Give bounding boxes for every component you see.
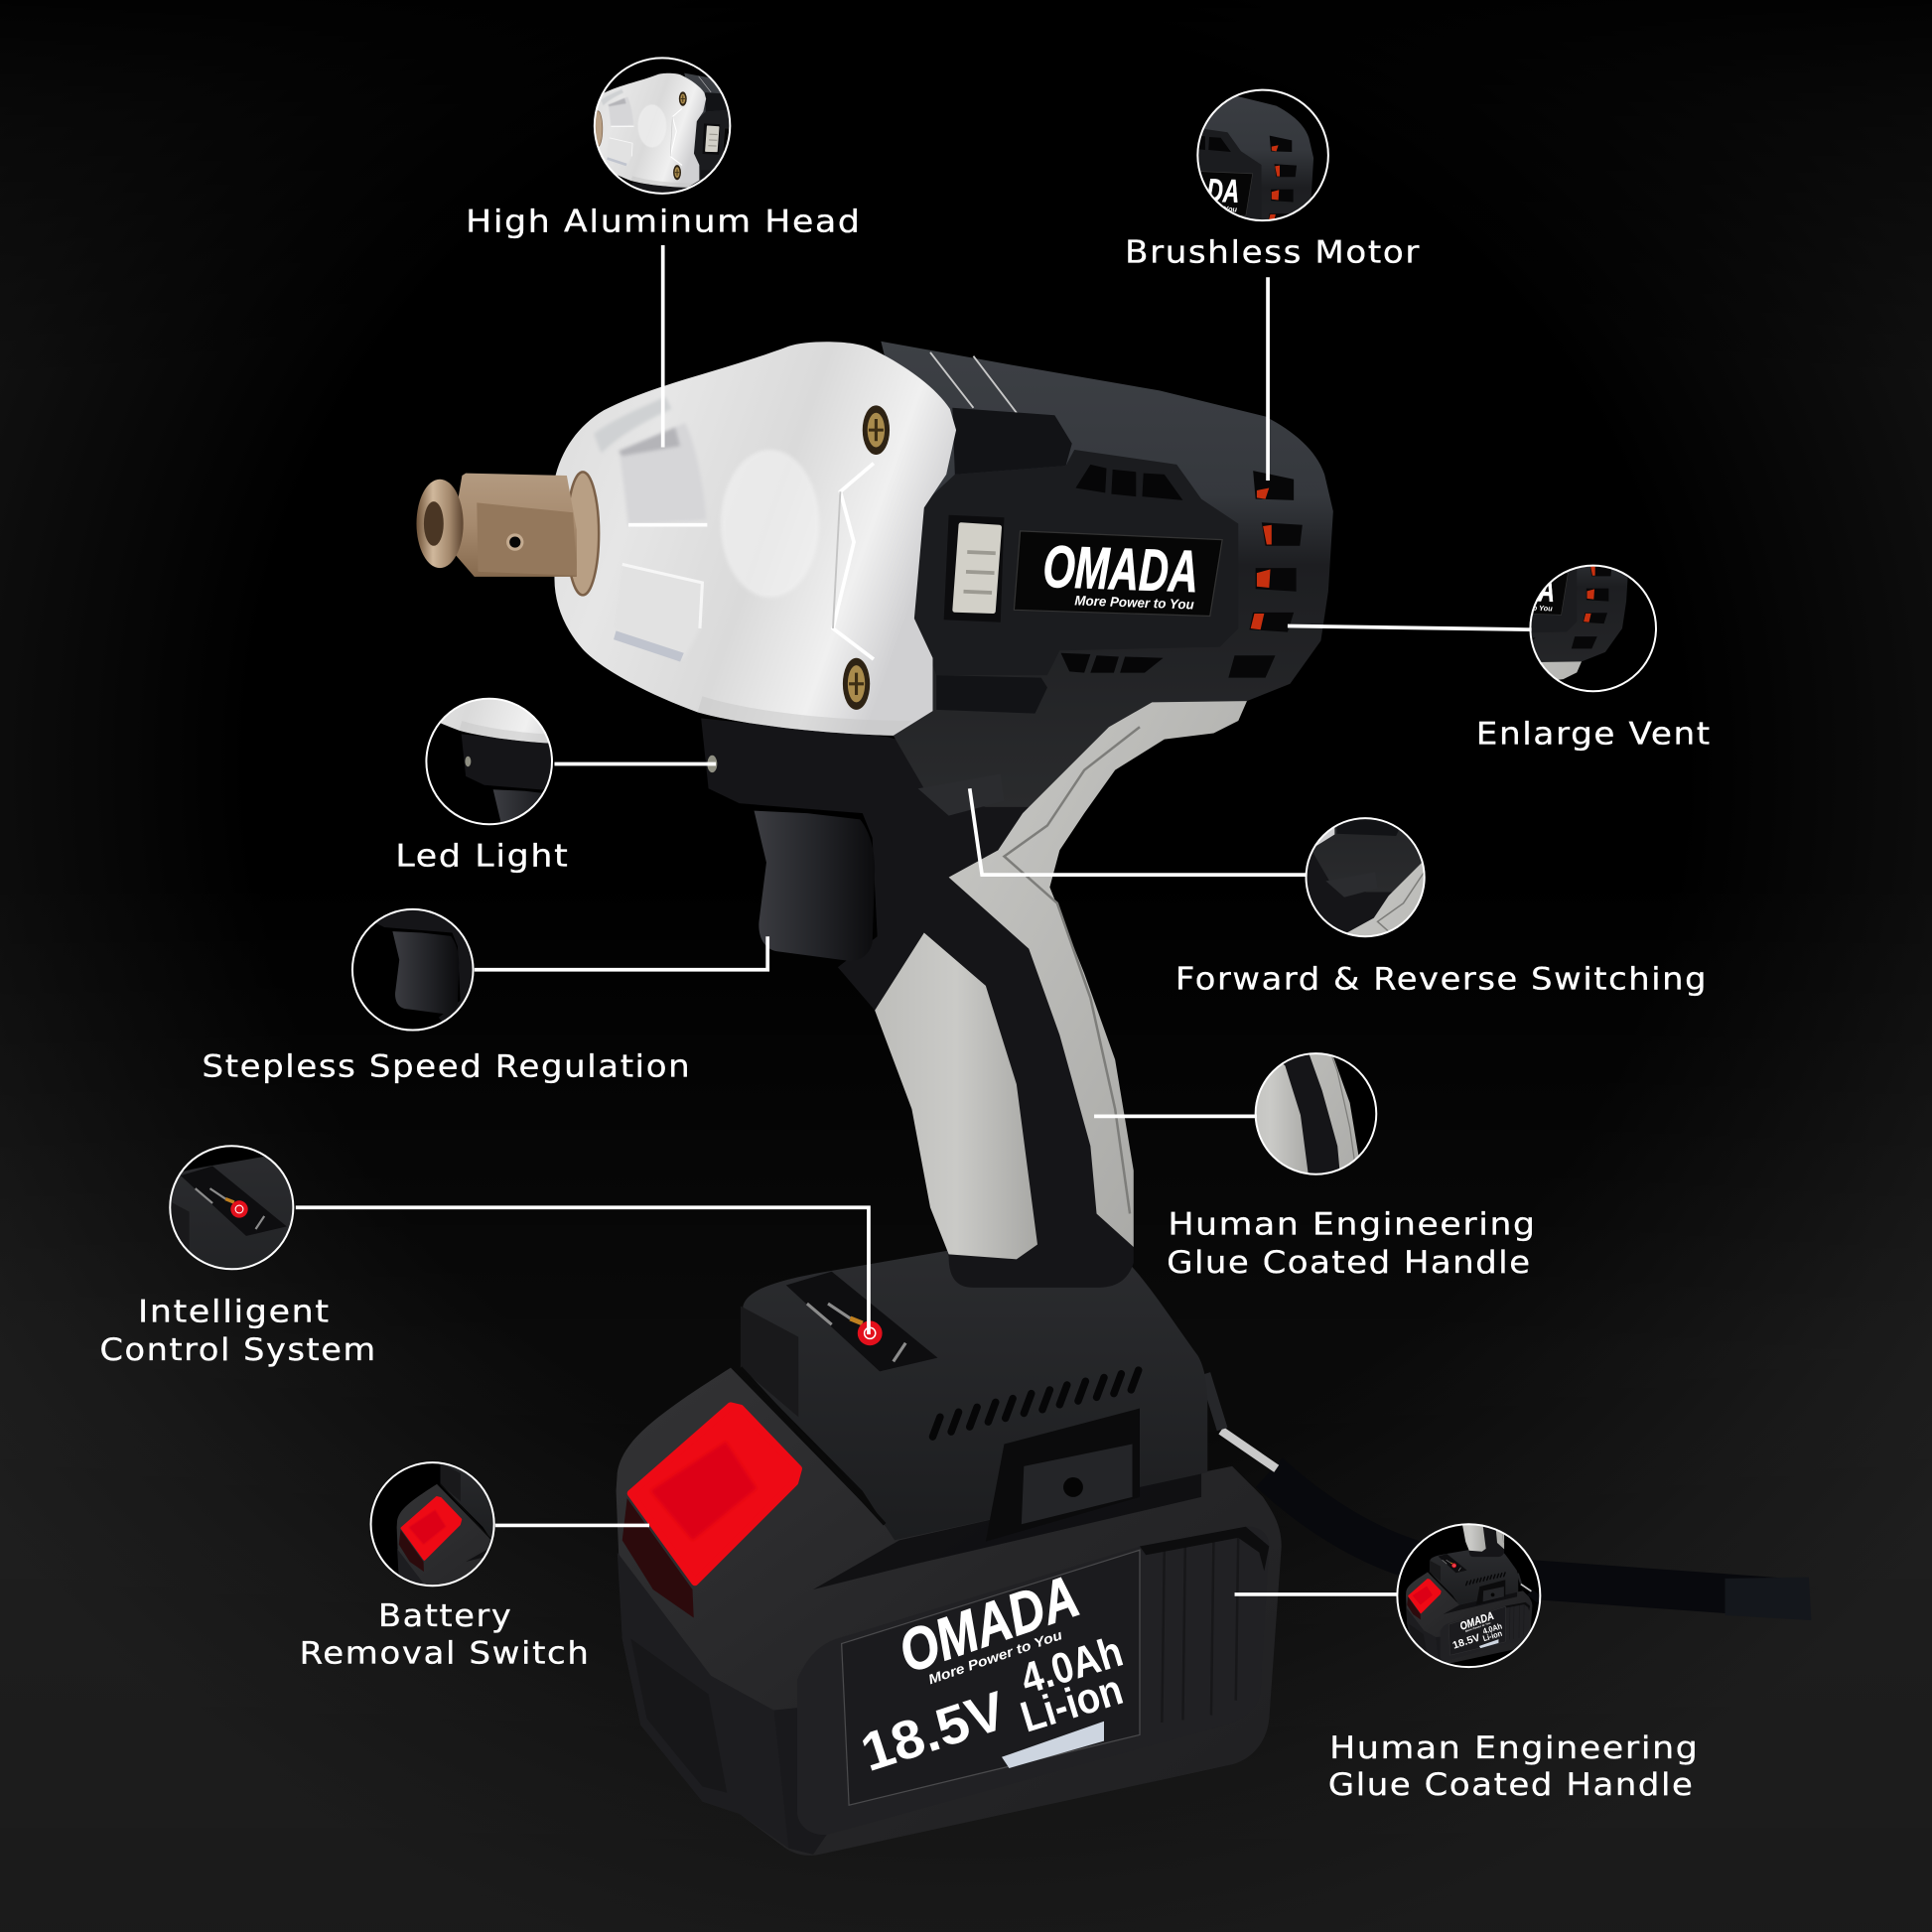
- upper vents: [1075, 465, 1182, 500]
- brand plate: OMADA: [1041, 533, 1199, 605]
- trigger: [755, 811, 875, 961]
- thumbnail: vent: [1531, 566, 1628, 680]
- callout: Forward & Reverse Switching: [967, 788, 1704, 997]
- product photo: impact wrench with battery: [416, 342, 1811, 1856]
- callout: High Aluminum Head: High Aluminum Head: [466, 204, 862, 239]
- callout: Battery Removal Switch: Removal Switch: [300, 1635, 590, 1671]
- callout: Led Light: [399, 697, 717, 874]
- thumbnail: battery: [1398, 1525, 1539, 1666]
- battery pack: 18.5V: [854, 1680, 1014, 1783]
- square drive anvil: [416, 472, 599, 595]
- battery pack: 4.0Ah: [1016, 1628, 1128, 1704]
- callout: Enlarge Vent: Enlarge Vent: [1476, 717, 1712, 753]
- callout: Human Engineering Glue Coated Handle (battery): Glue Coated Handle: [1328, 1767, 1694, 1803]
- rear vents: [1228, 471, 1303, 678]
- callout: Human Engineering Glue Coated Handle (grip): Glue Coated Handle: [1167, 1245, 1532, 1281]
- motor housing: [881, 342, 1333, 807]
- selector button: [944, 515, 1004, 622]
- front LED screw: [707, 756, 717, 772]
- thumbnail: motor: [1198, 96, 1314, 220]
- callout: Human Engineering Glue Coated Handle (battery): Human Engineering: [1329, 1730, 1699, 1766]
- lower vents: [1061, 653, 1164, 673]
- head screws: [843, 405, 890, 710]
- aluminum head: [554, 342, 956, 736]
- callout: Intelligent Control System: Control System: [100, 1332, 377, 1368]
- rear grip overlay: [949, 701, 1247, 1247]
- thumbnail: grip: [1257, 1054, 1358, 1173]
- callout: Battery Removal Switch: Battery: [378, 1598, 512, 1634]
- wrist strap: [1205, 1374, 1811, 1620]
- direction switch: [918, 773, 1004, 816]
- callout: Led Light: Led Light: [395, 838, 569, 874]
- callout: Forward & Reverse Switching: Forward & Reverse Switching: [1175, 962, 1708, 998]
- callout: Human Engineering Glue Coated Handle (grip): Human Engineering: [1169, 1207, 1537, 1243]
- battery mount base: [741, 1251, 1207, 1542]
- thumbnail: control panel: [171, 1148, 292, 1269]
- callout: Human Engineering Glue Coated Handle (grip): [1094, 1052, 1532, 1274]
- front grip overlay: [875, 932, 1037, 1259]
- callout: Stepless Speed Regulation: [205, 907, 770, 1084]
- brand plate: More Power to You: [1074, 593, 1195, 613]
- handle core: [701, 719, 1134, 1288]
- thumbnail: trigger: [376, 910, 473, 1021]
- thumbnail: LED light: [441, 699, 551, 822]
- callout: Intelligent Control System: Intelligent: [138, 1295, 331, 1330]
- housing stripes: [930, 352, 1017, 413]
- side panel: [914, 450, 1238, 675]
- battery label text: OMADA: [891, 1563, 1087, 1686]
- battery pack: Li-ion: [1016, 1666, 1128, 1742]
- callout: Brushless Motor: Brushless Motor: [1125, 234, 1421, 270]
- callout: Intelligent Control System: [101, 1145, 871, 1367]
- brand plate: [1014, 531, 1222, 617]
- battery pack: [617, 1368, 1282, 1856]
- battery pack: More Power to You: [926, 1627, 1064, 1687]
- release button: [630, 1406, 798, 1583]
- thumbnail: aluminum head: [596, 73, 729, 193]
- thumbnail: direction switch: [1307, 819, 1424, 935]
- callout: Stepless Speed Regulation: Stepless Speed Regulation: [203, 1049, 691, 1085]
- callout: Enlarge Vent: [1287, 564, 1710, 751]
- thumbnail: release switch: [371, 1463, 492, 1585]
- callout: Human Engineering Glue Coated Handle (battery): [1235, 1523, 1695, 1796]
- callout: Brushless Motor: [1128, 89, 1420, 481]
- callout: Battery Removal Switch: [302, 1461, 649, 1664]
- callout: High Aluminum Head: [469, 57, 857, 447]
